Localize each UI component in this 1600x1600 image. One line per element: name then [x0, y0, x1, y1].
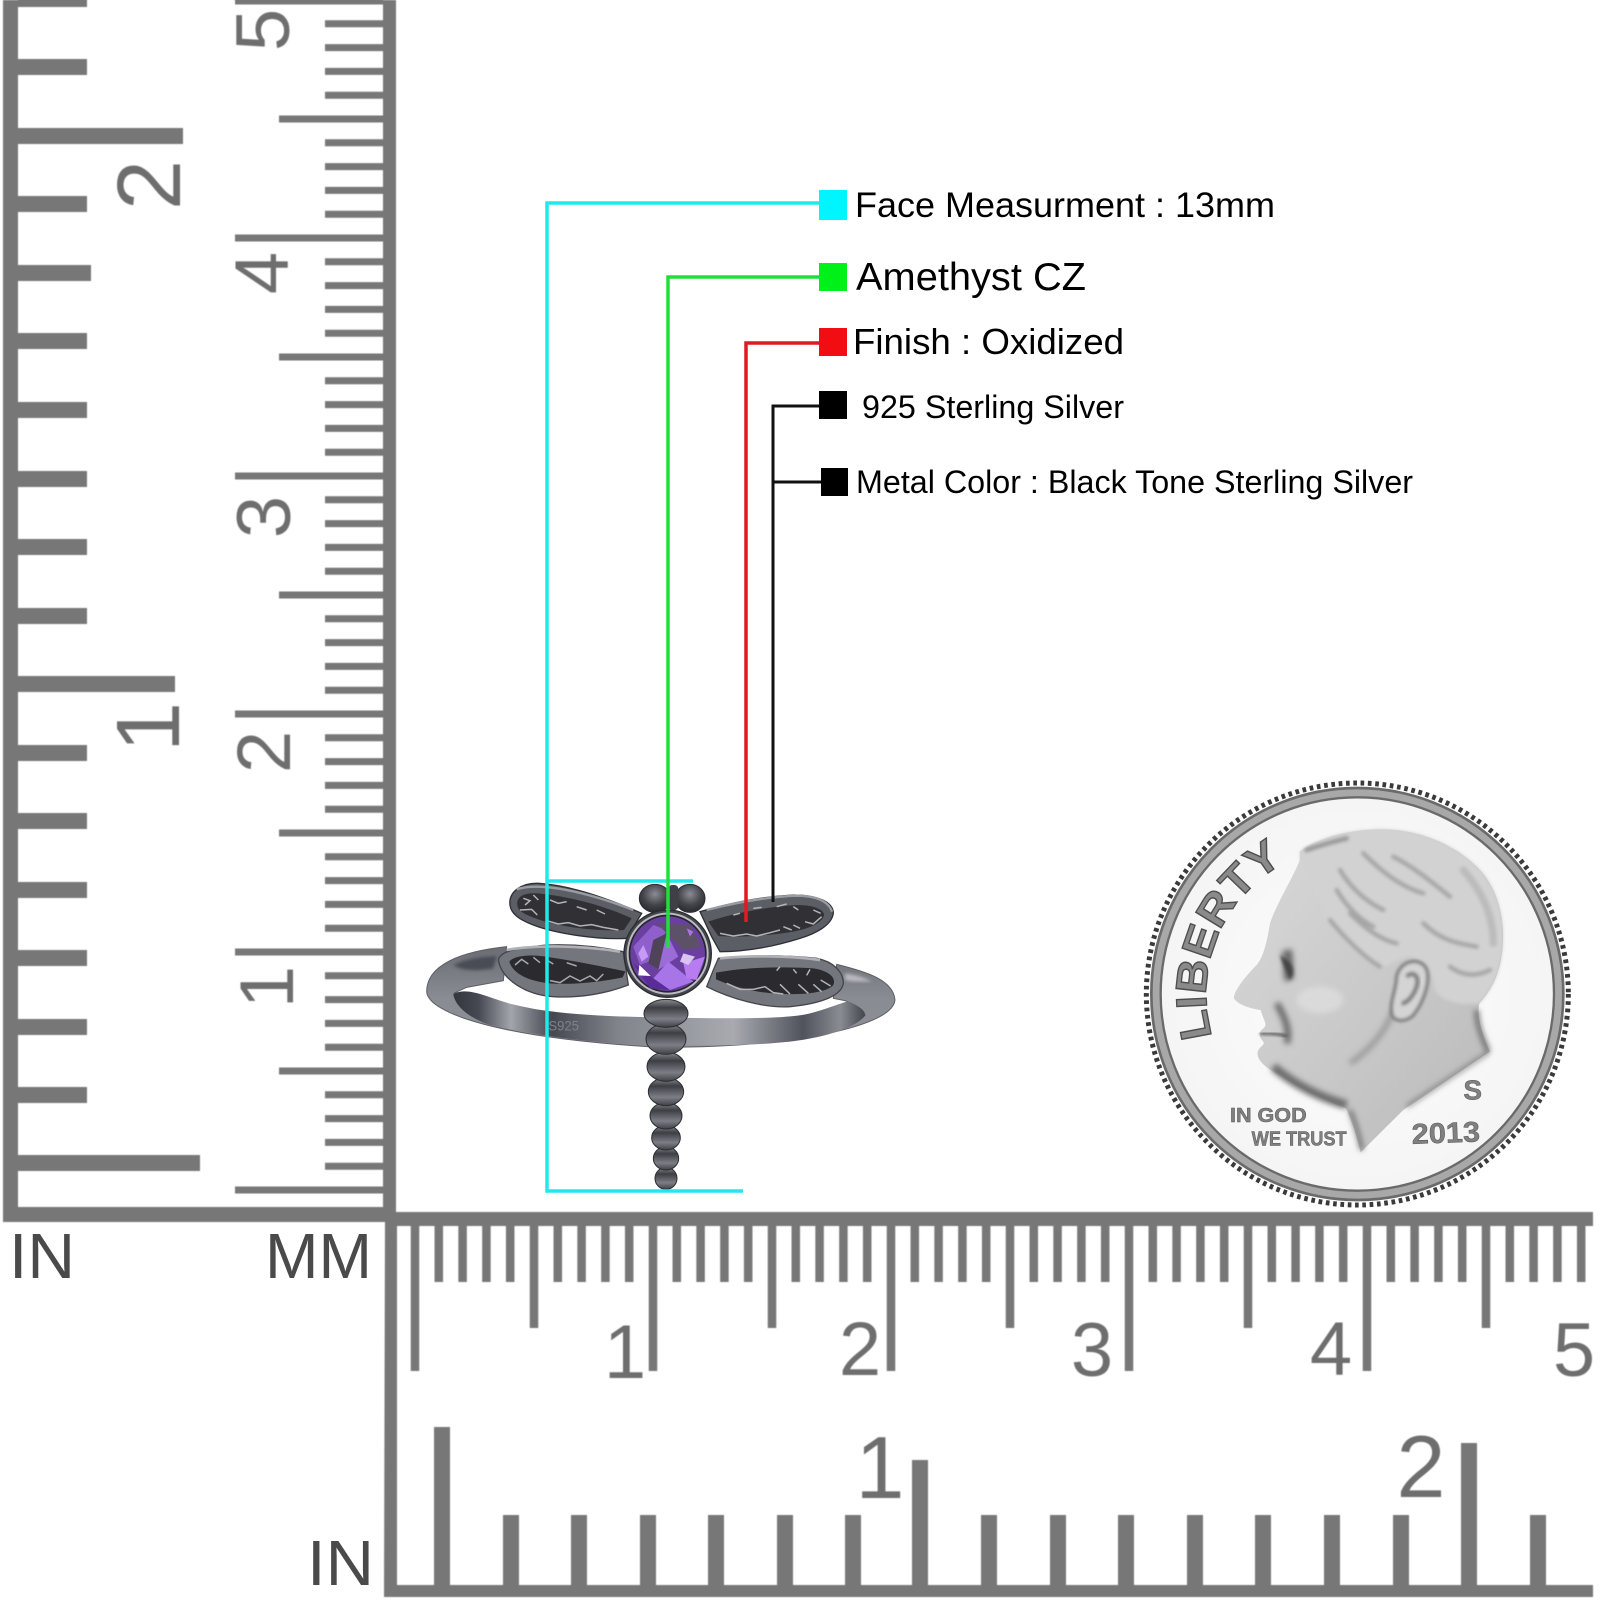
dragonfly body beads [644, 999, 688, 1189]
year: 2013 [1411, 1116, 1481, 1151]
band highlight left [453, 956, 497, 970]
legend: amethyst: Amethyst CZ [856, 256, 1086, 299]
coin rim [1151, 788, 1563, 1200]
portrait hair [1300, 829, 1503, 1004]
LIBERTY lettering: LIBERTY [1175, 836, 1275, 1040]
vertical ruler [3, 0, 396, 1222]
In God We Trust lettering: WE TRUST [1252, 1127, 1347, 1150]
leader line: silver and metal colour [773, 406, 821, 902]
In God We Trust lettering: IN GOD [1230, 1104, 1307, 1127]
dragonfly eyes [639, 884, 705, 912]
bezel [624, 910, 711, 997]
ring band [427, 947, 895, 1047]
amethyst gem [630, 916, 705, 991]
ruler unit labels [9, 1220, 374, 1599]
dragonfly ring [427, 883, 895, 1189]
hair strands [1307, 838, 1493, 975]
lower right wing [707, 956, 843, 1007]
vertical ruler numbers: 2 [222, 731, 307, 773]
legend: face measurement: Face Measurment : 13mm [855, 186, 1275, 225]
leader line: amethyst [668, 277, 819, 948]
mint mark: S [1463, 1074, 1482, 1105]
S925 stamp: S925 [548, 1017, 579, 1033]
legend: finish: Finish : Oxidized [853, 321, 1124, 362]
horizontal ruler numbers: 1 [856, 1418, 904, 1517]
horizontal ruler [384, 1212, 1595, 1597]
horizontal ruler numbers [604, 1307, 1595, 1517]
vertical ruler numbers: 4 [220, 252, 305, 294]
portrait head and neck [1234, 829, 1503, 1152]
inch ticks on horizontal ruler [442, 1427, 1538, 1585]
millimetre ticks on horizontal ruler [415, 1226, 1581, 1371]
vertical ruler frame [3, 0, 396, 1222]
band highlight right [845, 973, 872, 982]
vertical ruler numbers: 3 [222, 496, 307, 538]
vertical ruler numbers: 5 [221, 9, 306, 51]
coin field [1161, 797, 1554, 1191]
cheek highlight [1297, 987, 1343, 1013]
vertical ruler numbers: 1 [99, 702, 199, 752]
coin milled edge [1146, 783, 1568, 1205]
face shading [1273, 950, 1488, 1150]
horizontal ruler numbers: 4 [1310, 1307, 1352, 1392]
legend: metal colour: Metal Color : Black Tone Sterling Silver [856, 464, 1413, 500]
leader line: finish [746, 343, 819, 922]
leader line: face measurement [547, 203, 819, 1191]
bezel highlight [628, 914, 708, 994]
ruler unit labels: MM [265, 1220, 372, 1292]
vertical ruler numbers [99, 9, 310, 1008]
horizontal ruler numbers: 1 [604, 1310, 646, 1395]
dime coin [1144, 780, 1571, 1208]
horizontal ruler numbers: 3 [1071, 1308, 1113, 1393]
millimetre ticks on vertical ruler [235, 1, 383, 1190]
ruler unit labels: IN [9, 1220, 75, 1292]
band inner surface [453, 991, 865, 1046]
legend: sterling silver: 925 Sterling Silver [862, 389, 1124, 425]
upper right wing [700, 895, 833, 952]
horizontal ruler numbers: 2 [839, 1307, 881, 1392]
ruler unit labels: IN [307, 1527, 374, 1599]
upper left wing [510, 883, 642, 939]
horizontal ruler numbers: 5 [1553, 1308, 1595, 1393]
vertical ruler numbers: 2 [100, 160, 200, 210]
horizontal ruler frame [384, 1212, 1593, 1597]
In God We Trust lettering [1230, 1104, 1347, 1150]
horizontal ruler numbers: 2 [1397, 1417, 1445, 1516]
eye [1280, 955, 1293, 980]
vertical ruler numbers: 1 [225, 966, 310, 1008]
mouth [1260, 1033, 1287, 1037]
portrait [1234, 829, 1503, 1152]
inch ticks on vertical ruler [18, 0, 200, 1163]
ear [1391, 961, 1428, 1020]
lower left wing [498, 945, 628, 997]
